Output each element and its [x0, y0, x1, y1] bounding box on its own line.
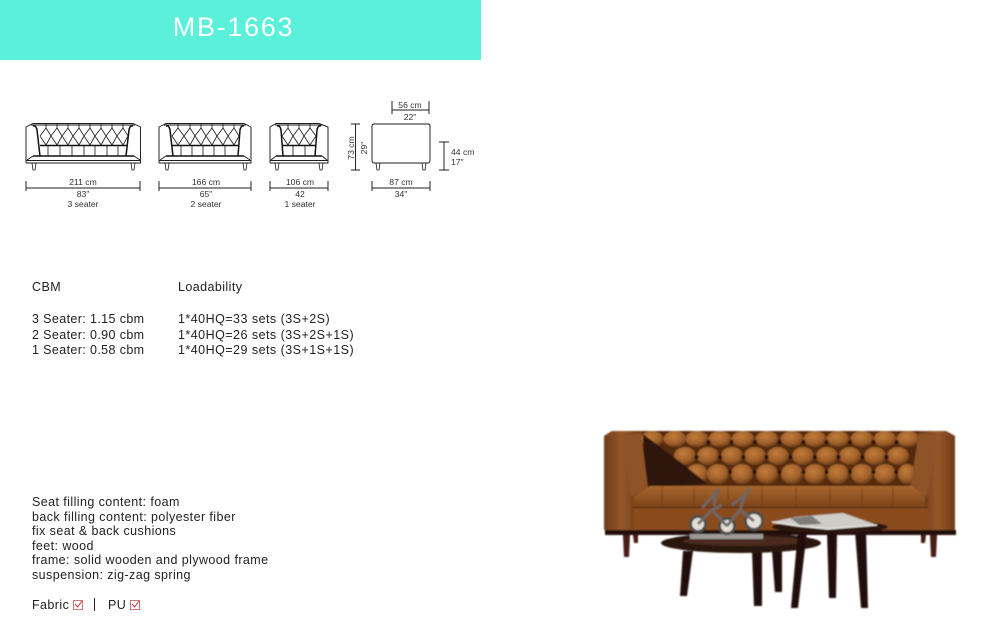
drawing: side view: 17": [451, 157, 464, 167]
drawing: 3 seater: [26, 124, 140, 209]
specifications text: frame: solid wooden and plywood frame: [32, 553, 268, 567]
loadability values: [178, 312, 354, 357]
drawing: side view: 87 cm: [389, 177, 413, 187]
drawing: side view: 22": [404, 112, 416, 122]
CBM heading: CBM: [32, 280, 61, 294]
sofa legs: [623, 535, 937, 557]
specifications text: back filling content: polyester fiber: [32, 510, 236, 524]
loadability values: 1*40HQ=29 sets (3S+1S+1S): [178, 343, 354, 357]
specifications text: suspension: zig-zag spring: [32, 568, 191, 582]
drawing: side view: 29": [359, 142, 369, 154]
tuft buttons: [694, 440, 898, 474]
drawing: 2 seater: 2 seater: [190, 199, 222, 209]
CBM values: 3 Seater: 1.15 cbm: [32, 312, 144, 326]
CBM values: [32, 312, 144, 357]
title banner: [0, 0, 481, 60]
drawing: side view: [346, 100, 474, 199]
drawing: 2 seater: 166 cm: [192, 177, 220, 187]
loadability values: 1*40HQ=33 sets (3S+2S): [178, 312, 330, 326]
sofa base: [605, 530, 956, 535]
PU label: PU: [108, 598, 126, 612]
right arm: [920, 431, 955, 530]
dark throw cushion: [643, 434, 708, 488]
drawing: 2 seater: 65": [200, 189, 212, 199]
drawing: 2 seater: [159, 124, 251, 209]
material options: [32, 598, 140, 612]
divider bar: [94, 598, 95, 611]
loadability heading: Loadability: [178, 280, 242, 294]
icon: PU checkbox: [130, 600, 140, 610]
seat cushion: [633, 486, 925, 507]
left arm: [604, 431, 640, 530]
specifications text: fix seat & back cushions: [32, 524, 176, 538]
icon: fabric checkbox: [73, 600, 83, 610]
CBM values: 2 Seater: 0.90 cbm: [32, 328, 144, 342]
drawing: 1 seater: [270, 124, 328, 209]
drawing: 3 seater: 211 cm: [69, 177, 97, 187]
drawing: 1 seater: 42: [295, 189, 305, 199]
drawing: 3 seater: 83": [77, 189, 89, 199]
magazine: [772, 513, 877, 529]
CBM values: 1 Seater: 0.58 cbm: [32, 343, 144, 357]
sofa back: [604, 431, 955, 530]
round table: [661, 533, 821, 606]
drawing: side view: 44 cm: [451, 147, 474, 157]
tufted pillows: [640, 431, 920, 484]
drawing: side view: 56 cm: [398, 100, 422, 110]
bicycle sculpture: [690, 488, 763, 539]
drawing: side view: 34": [395, 189, 407, 199]
drawing: side view: 73 cm: [346, 136, 356, 160]
specifications text: Seat filling content: foam: [32, 495, 180, 509]
title: MB-1663: [173, 12, 294, 42]
drawing: 3 seater: 3 seater: [67, 199, 99, 209]
side table: [772, 521, 888, 608]
seat front: [633, 507, 928, 530]
fabric label: Fabric: [32, 598, 69, 612]
drawing: 1 seater: 1 seater: [284, 199, 316, 209]
specifications text: [32, 495, 268, 582]
loadability values: 1*40HQ=26 sets (3S+2S+1S): [178, 328, 354, 342]
drawing: 1 seater: 106 cm: [286, 177, 314, 187]
specifications text: feet: wood: [32, 538, 94, 552]
CBM table: [32, 280, 354, 357]
photo: leather sofa with tables: [604, 431, 956, 608]
